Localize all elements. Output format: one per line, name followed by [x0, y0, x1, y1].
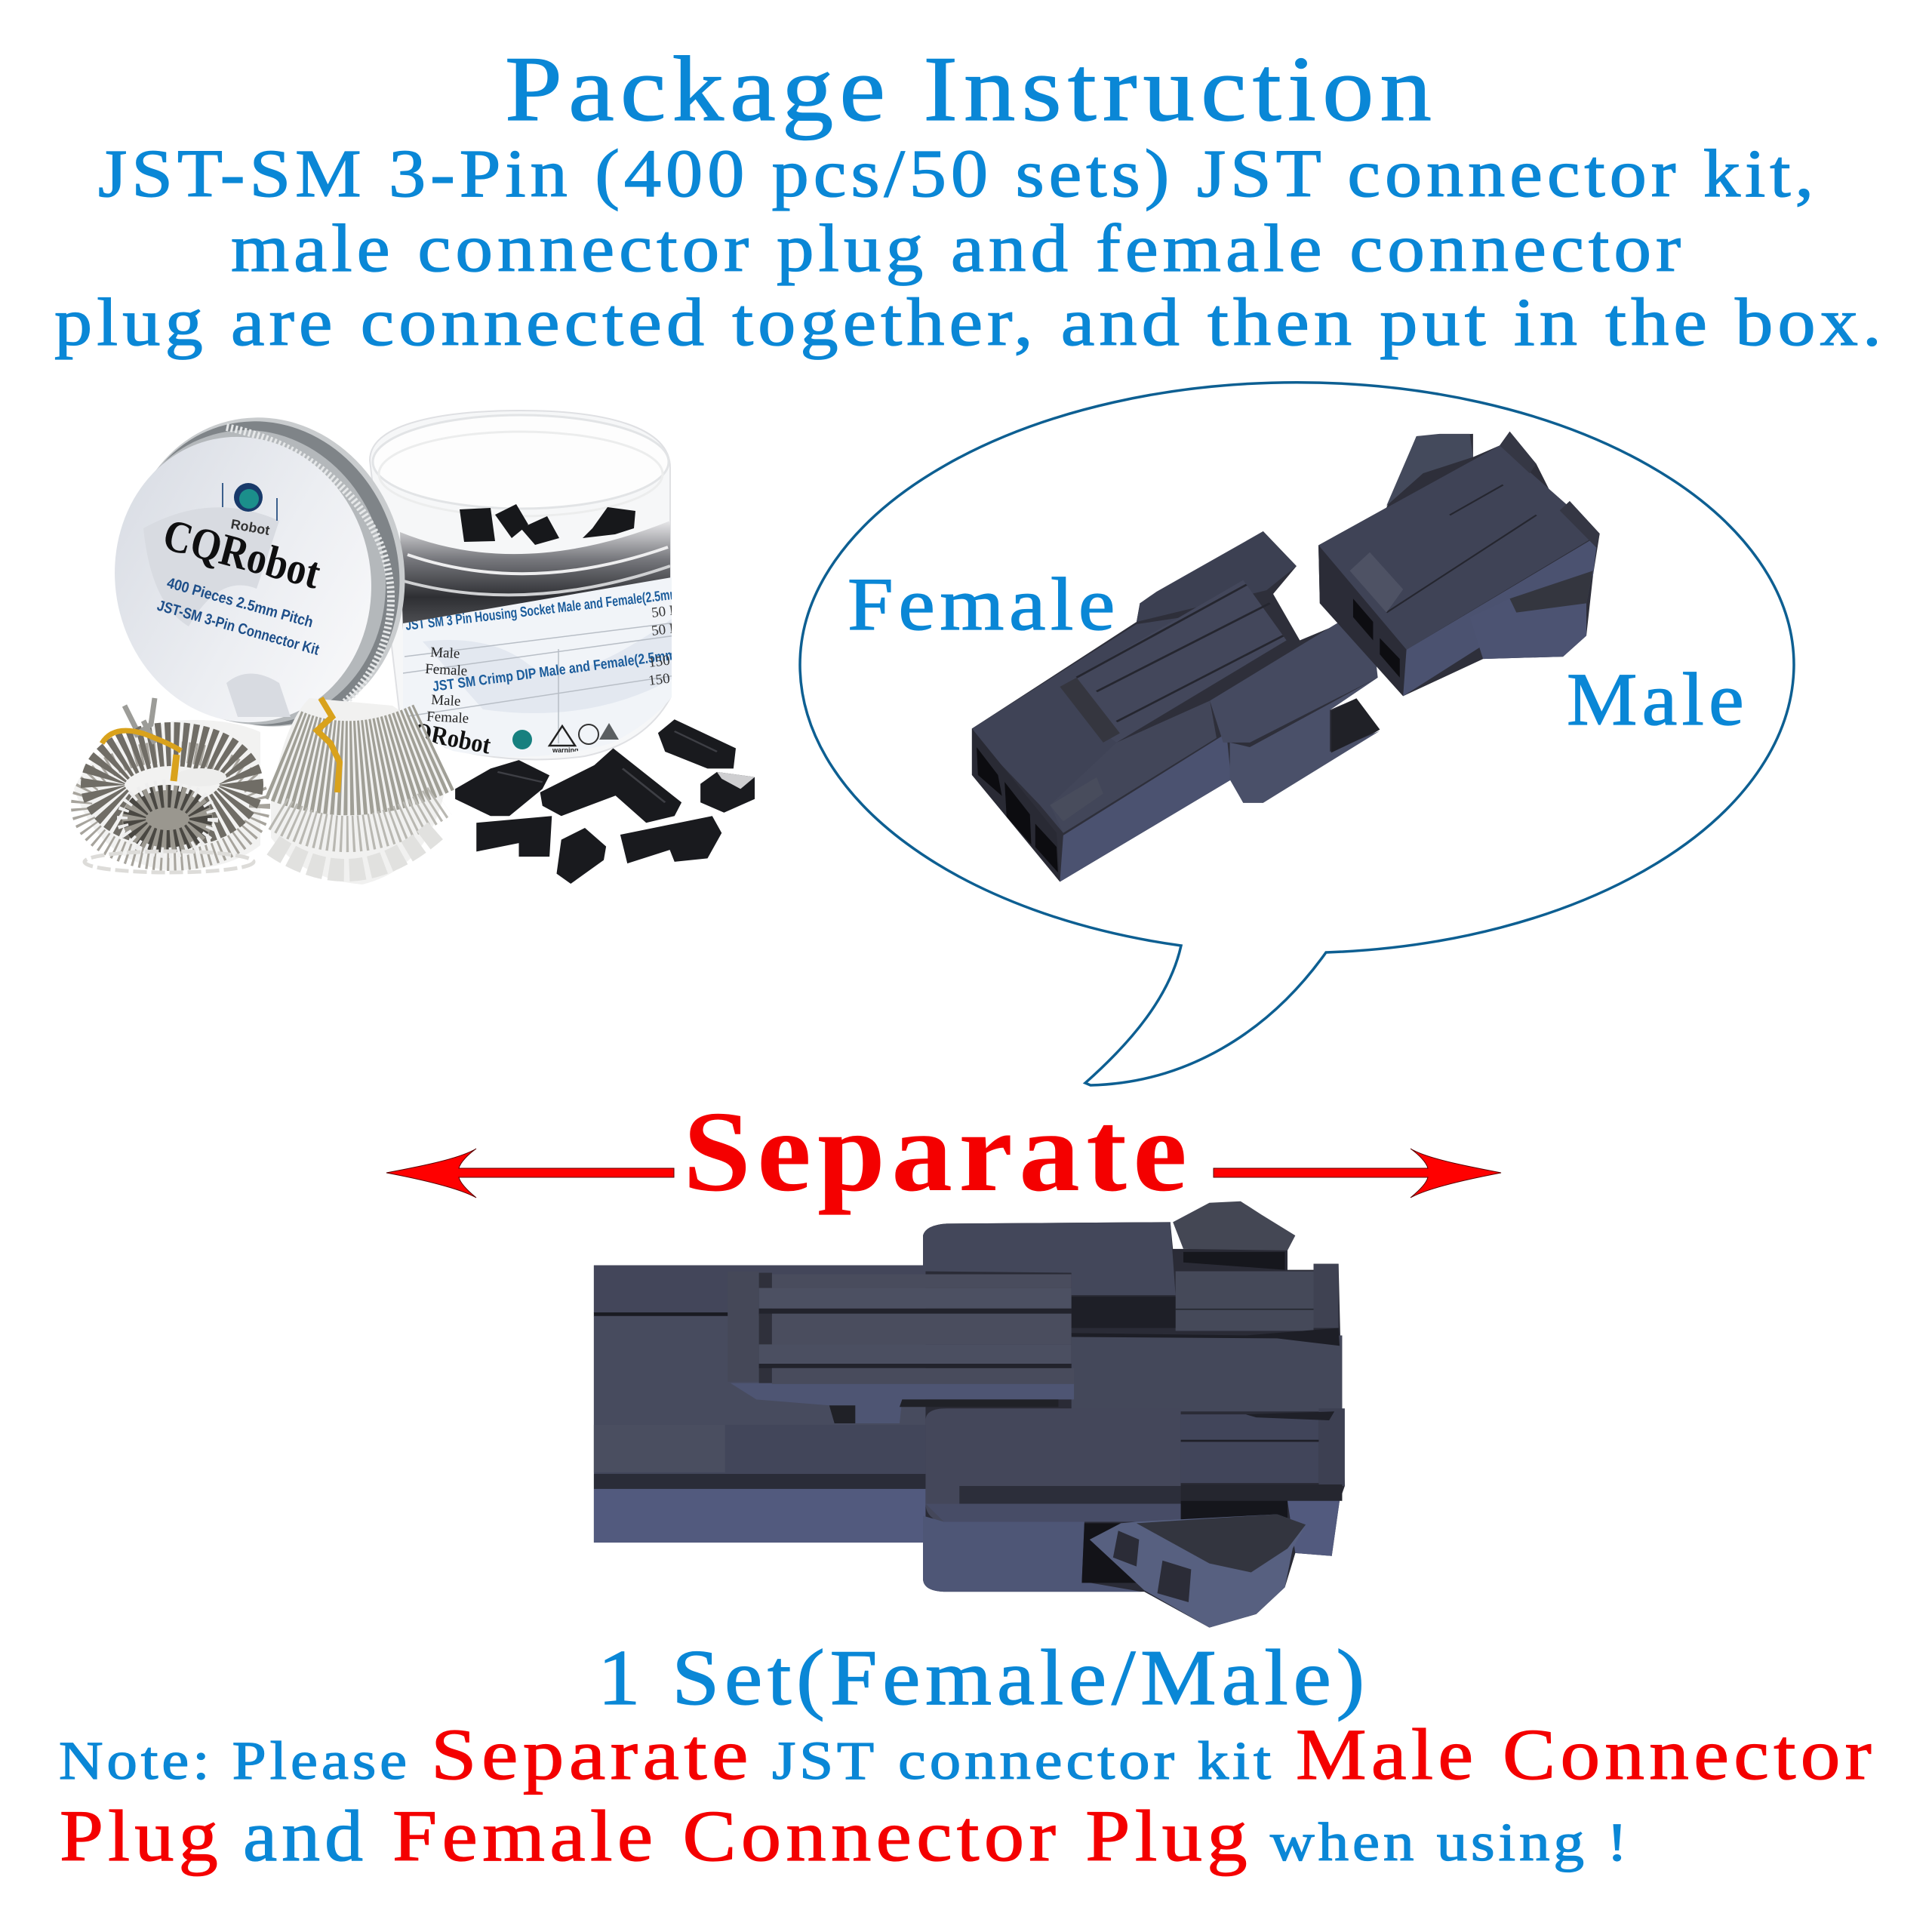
jar label	[403, 577, 672, 756]
connector pair photo in bubble	[972, 432, 1600, 881]
male connector	[1318, 432, 1600, 696]
note text: Separate	[431, 1714, 753, 1795]
lid logo	[223, 483, 277, 538]
lid: 400 Pieces 2.5mm Pitch	[165, 575, 315, 631]
note text: Female Connector Plug	[392, 1795, 1252, 1876]
jar label: 150 Pcs	[648, 668, 694, 689]
subtitle text block: JST-SM 3-Pin (400 pcs/50 sets) JST connector kit,	[98, 137, 1818, 211]
bubble label: Female: Female	[848, 562, 1120, 646]
note text: Plug	[60, 1795, 223, 1876]
separate heading: Separate	[683, 1088, 1193, 1216]
lid logo: Robot	[229, 516, 271, 538]
speech bubble	[800, 383, 1794, 1085]
note text	[59, 1714, 1876, 1876]
note text: Note: Please	[59, 1730, 411, 1791]
jar	[369, 410, 672, 761]
jar label: 50 Pcs	[651, 601, 690, 621]
note text: Male Connector	[1296, 1714, 1876, 1795]
jar label: Male	[431, 692, 461, 709]
jar label: Male	[430, 645, 460, 662]
jar label: CQRobot	[395, 715, 494, 760]
jar label: Female	[425, 661, 468, 679]
female latch	[728, 1272, 1074, 1423]
female connector	[972, 531, 1380, 881]
jar label: JST SM Crimp DIP Male and Female(2.5mm	[432, 648, 677, 695]
jar label: 50 Pcs	[651, 619, 690, 639]
note text: connector kit	[898, 1730, 1275, 1791]
subtitle text block	[54, 137, 1886, 360]
note text: and	[243, 1795, 368, 1876]
separate arrows	[386, 1149, 1501, 1198]
set caption: 1 Set(Female/Male)	[598, 1633, 1370, 1721]
product photo: jar, lid, terminals and connectors	[74, 388, 755, 884]
note text: when using !	[1270, 1812, 1631, 1872]
terminal pin piles	[74, 698, 446, 884]
subtitle text block: plug are connected together, and then put in the box.	[54, 285, 1886, 360]
mated connector photo	[594, 1201, 1345, 1628]
male latch housing	[923, 1408, 1306, 1628]
jar label: 150 Pcs	[648, 650, 694, 671]
lid: JST-SM 3-Pin Connector Kit	[155, 598, 321, 659]
note text: JST	[772, 1730, 878, 1791]
bubble label: Male: Male	[1567, 657, 1749, 741]
title: Package Instruction	[505, 37, 1438, 140]
lid	[88, 388, 437, 756]
gold foil strips	[102, 698, 340, 792]
lid: CQRobot	[158, 509, 326, 598]
small black connectors	[455, 719, 755, 884]
left pile	[74, 698, 260, 872]
jar label: Female	[426, 709, 469, 727]
connectors inside jar	[460, 504, 635, 545]
jar label: warning	[552, 746, 579, 754]
jar label: JST SM 3 Pin Housing Socket Male and Female(2.5mm	[405, 586, 680, 634]
subtitle text block: male connector plug and female connector	[231, 211, 1685, 286]
right pile	[271, 698, 446, 884]
